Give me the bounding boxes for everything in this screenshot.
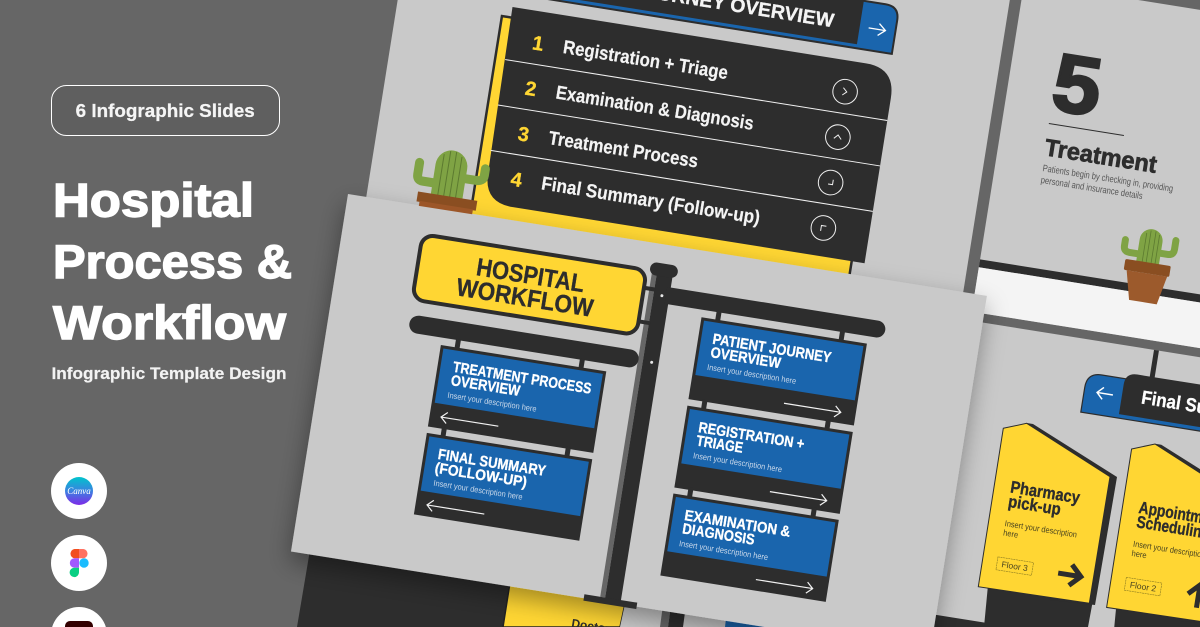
- sign: examination and diagnosis: EXAMINATION &: [683, 507, 792, 541]
- sign: treatment process overview: OVERVIEW: [450, 372, 522, 400]
- slide: lower slide strip behind main: [297, 550, 950, 627]
- list row 1: 1: [531, 32, 545, 56]
- sign: final summary follow-up: FINAL SUMMARY: [437, 446, 547, 480]
- sign: final summary follow-up: [414, 425, 594, 541]
- card text: pharmacy: Insert your description: [1004, 518, 1078, 540]
- sign pole: [583, 259, 890, 627]
- list row 1: [531, 30, 859, 106]
- list row 4: 4: [509, 169, 524, 192]
- list row 4: [509, 166, 837, 242]
- heading sign: hospital workflow: [412, 234, 647, 335]
- slide: top right treatment: 5: [1046, 37, 1108, 134]
- left hanging bar: [408, 314, 640, 369]
- card text: pharmacy: Floor 3: [1001, 559, 1029, 573]
- card text: pharmacy: here: [1003, 527, 1019, 540]
- sign: registration + triage: [674, 397, 854, 514]
- sign: final summary follow-up: Insert your description here: [433, 478, 524, 502]
- sign: patient journey overview: Insert your description here: [706, 362, 797, 386]
- slide group: rotated slides: [281, 0, 1200, 627]
- sign: registration + triage: Insert your description here: [692, 450, 783, 474]
- list row 4: Final Summary (Follow-up): [540, 173, 761, 229]
- list row 2: Examination & Diagnosis: [554, 83, 755, 135]
- subtitle: Infographic Template Design: [52, 364, 286, 383]
- icon: cactus right: [1116, 225, 1177, 306]
- sign: treatment process overview: Insert your description here: [447, 390, 538, 414]
- card text: pharmacy: pick-up: [1007, 492, 1062, 519]
- slide: bottom right final summary: [863, 314, 1200, 627]
- heading sign: hospital workflow: HOSPITAL: [474, 253, 586, 298]
- sign: patient journey overview: OVERVIEW: [709, 344, 783, 372]
- list row 3: [516, 121, 845, 197]
- list row 3: 3: [516, 123, 531, 147]
- slide: top right treatment: Treatment: [1043, 134, 1159, 179]
- card: appointment scheduling shape: [1107, 444, 1200, 627]
- sign: examination and diagnosis: [660, 485, 840, 602]
- list row 3: Treatment Process: [547, 128, 700, 173]
- badge: 6 infographic slides: 6 Infographic Slides: [76, 101, 255, 121]
- slide: top patient journey list: [362, 0, 1014, 317]
- sign: patient journey overview: [688, 308, 868, 426]
- list row 2: 2: [524, 78, 538, 101]
- card text: appointment: Floor 2: [1129, 580, 1157, 594]
- icon: figma: [51, 535, 107, 591]
- sign: registration + triage: REGISTRATION +: [697, 419, 806, 453]
- card: pharmacy pick-up shape: [978, 423, 1117, 627]
- sign: examination and diagnosis: Insert your description here: [678, 538, 769, 562]
- card text: appointment: here: [1131, 548, 1148, 560]
- heading sign: hospital workflow: WORKFLOW: [454, 273, 596, 323]
- card text: appointment: [1123, 498, 1200, 610]
- card text: pharmacy: Pharmacy: [1009, 478, 1082, 507]
- icon: illustrator: [51, 607, 107, 627]
- sign: treatment process overview: [428, 337, 608, 453]
- sign: examination and diagnosis: DIAGNOSIS: [681, 520, 756, 549]
- title: Workflow: [53, 296, 286, 349]
- icon: canva: [51, 463, 107, 519]
- title: [53, 174, 292, 349]
- sign: final summary follow-up: (FOLLOW-UP): [434, 460, 528, 491]
- list row 1: Registration + Triage: [562, 37, 729, 84]
- badge: 6 infographic slides: [52, 86, 280, 136]
- card text group: [995, 477, 1200, 610]
- card text: pharmacy: [995, 477, 1095, 587]
- sign: registration + triage: TRIAGE: [695, 433, 744, 457]
- sign: patient journey overview: PATIENT JOURNEY: [711, 331, 833, 367]
- icon: cactus left: [413, 146, 487, 215]
- list row 2: [524, 75, 852, 151]
- slide: top right treatment: [972, 0, 1200, 375]
- slide: main hospital workflow: [291, 194, 987, 627]
- icon: canva: Canva: [67, 486, 91, 496]
- sign: treatment process overview: TREATMENT PROCESS: [452, 359, 593, 398]
- title: Hospital: [53, 174, 254, 227]
- slide: top right treatment: personal and insurance details: [1040, 175, 1144, 202]
- title: Process &: [53, 235, 292, 288]
